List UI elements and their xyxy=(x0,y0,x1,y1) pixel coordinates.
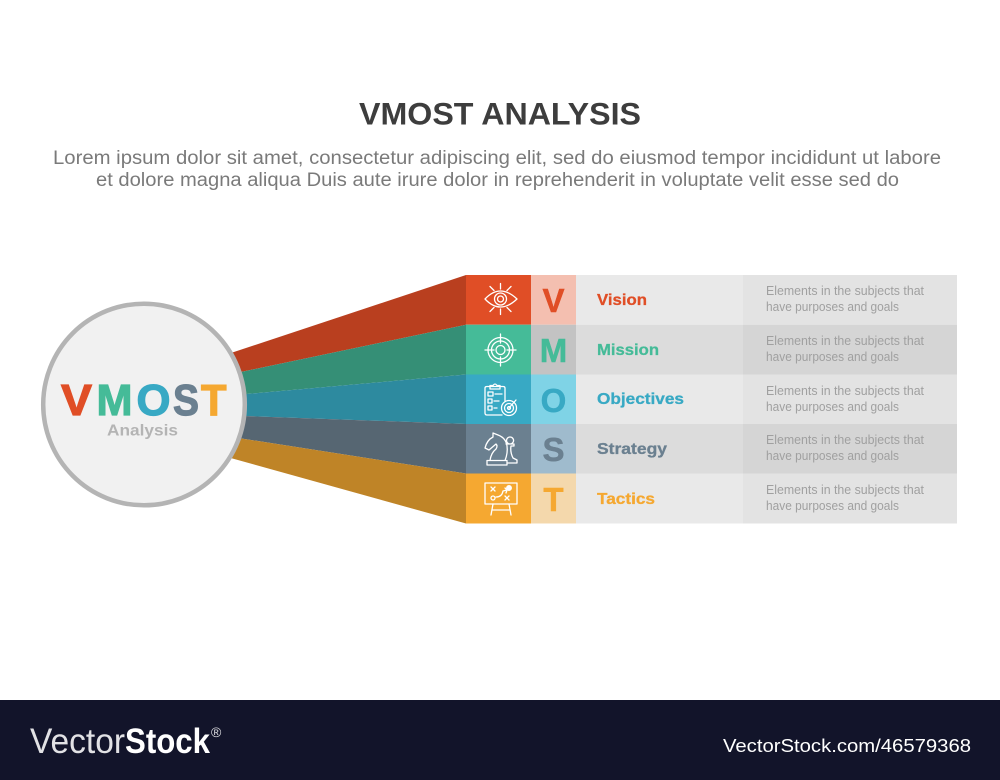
icon: tactics board xyxy=(485,483,517,515)
circle caption: Analysis xyxy=(107,423,178,440)
description: Elements in the subjects that xyxy=(766,334,925,348)
description: have purposes and goals xyxy=(766,499,899,513)
footer logo: Vector xyxy=(30,722,125,761)
title: VMOST ANALYSIS xyxy=(359,96,641,132)
footer id: VectorStock.com/46579368 xyxy=(723,736,971,756)
description xyxy=(766,483,925,513)
letter O: O xyxy=(541,382,566,419)
description: Elements in the subjects that xyxy=(766,483,925,497)
description: have purposes and goals xyxy=(766,300,899,314)
registered mark: ® xyxy=(211,724,222,740)
footer logo xyxy=(30,722,210,761)
letter V: V xyxy=(542,282,565,319)
label Objectives: Objectives xyxy=(597,391,684,408)
description xyxy=(766,284,925,314)
description: have purposes and goals xyxy=(766,400,899,414)
label Vision: Vision xyxy=(597,292,647,309)
icon: eye xyxy=(485,284,517,314)
icon: chess knight and pawn xyxy=(485,433,517,465)
circle wordmark xyxy=(61,376,227,425)
row: Strategy xyxy=(466,424,957,474)
description: Elements in the subjects that xyxy=(766,284,925,298)
label Strategy: Strategy xyxy=(597,441,667,458)
icon: target xyxy=(485,334,516,366)
letter M: M xyxy=(540,332,567,369)
circle wordmark: V xyxy=(61,376,93,425)
label Mission: Mission xyxy=(597,342,659,359)
circle wordmark: T xyxy=(201,376,227,425)
footer logo: Stock xyxy=(125,722,210,761)
subtitle text block: et dolore magna aliqua Duis aute irure dolor in reprehenderit in voluptate velit esse sed do xyxy=(96,170,899,191)
description: have purposes and goals xyxy=(766,350,899,364)
row: Objectives xyxy=(466,374,957,424)
description: have purposes and goals xyxy=(766,449,899,463)
subtitle text block: Lorem ipsum dolor sit amet, consectetur adipiscing elit, sed do eiusmod tempor incididunt ut labore xyxy=(53,148,941,169)
row: Vision xyxy=(466,275,957,325)
letter S: S xyxy=(542,431,565,468)
row: Tactics xyxy=(466,474,957,524)
funnel connecting circle to rows xyxy=(200,275,466,524)
icon: clipboard with target xyxy=(485,384,516,416)
letter T: T xyxy=(543,481,564,518)
row: Mission xyxy=(466,325,957,374)
description xyxy=(766,384,925,414)
description: Elements in the subjects that xyxy=(766,433,925,447)
footer bar xyxy=(0,700,1000,780)
description xyxy=(766,334,925,364)
circle wordmark: M xyxy=(96,376,132,425)
circle wordmark: S xyxy=(173,376,199,425)
circle wordmark: O xyxy=(136,376,170,425)
description: Elements in the subjects that xyxy=(766,384,925,398)
central circle: VMOST Analysis xyxy=(43,304,245,505)
label Tactics: Tactics xyxy=(597,491,655,508)
description xyxy=(766,433,925,463)
subtitle text block xyxy=(53,148,941,191)
